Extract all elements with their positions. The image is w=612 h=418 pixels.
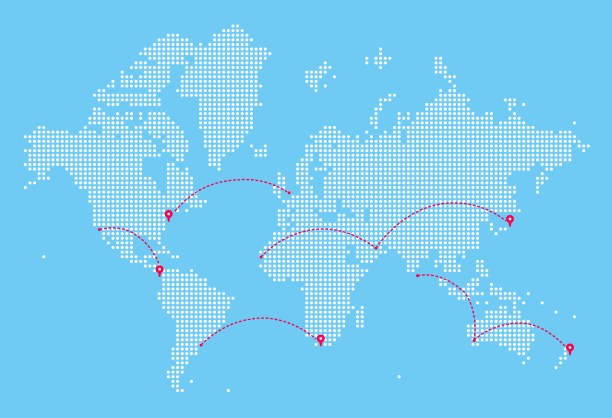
- North America dots: [25, 35, 206, 271]
- route: US to Europe: [175, 180, 289, 211]
- icon: map pin, Central America: [157, 266, 162, 277]
- route: Arabia to Japan: [376, 203, 506, 248]
- route hub marker: Arabia: [374, 246, 378, 250]
- route hub marker: Australia: [472, 339, 476, 342]
- route start marker: Mexico: [98, 228, 101, 231]
- route: Australia to New Zealand: [474, 323, 566, 347]
- icon: map pin, New Zealand: [567, 345, 573, 355]
- icon: map pin, United States: [166, 211, 171, 222]
- South America dots: [159, 271, 233, 391]
- route: West Africa to Arabia: [261, 229, 376, 257]
- route start marker: Europe: [288, 191, 290, 194]
- Africa dots: [261, 211, 400, 377]
- route start marker: West Africa: [260, 256, 262, 258]
- Greenland dots: [178, 26, 270, 169]
- Eurasia dots: [275, 49, 589, 298]
- route start marker: South America: [200, 344, 202, 346]
- Australia and Oceania dots: [468, 294, 575, 368]
- route start marker: South Asia: [416, 274, 419, 277]
- icon: map pin, Japan: [507, 216, 513, 227]
- route: Mexico to Central America: [100, 228, 158, 263]
- Iceland dots: [251, 146, 266, 155]
- route: South Asia to Australia: [418, 275, 475, 340]
- icon: map pin, South Africa: [318, 336, 324, 346]
- route: South America to South Africa: [201, 318, 316, 345]
